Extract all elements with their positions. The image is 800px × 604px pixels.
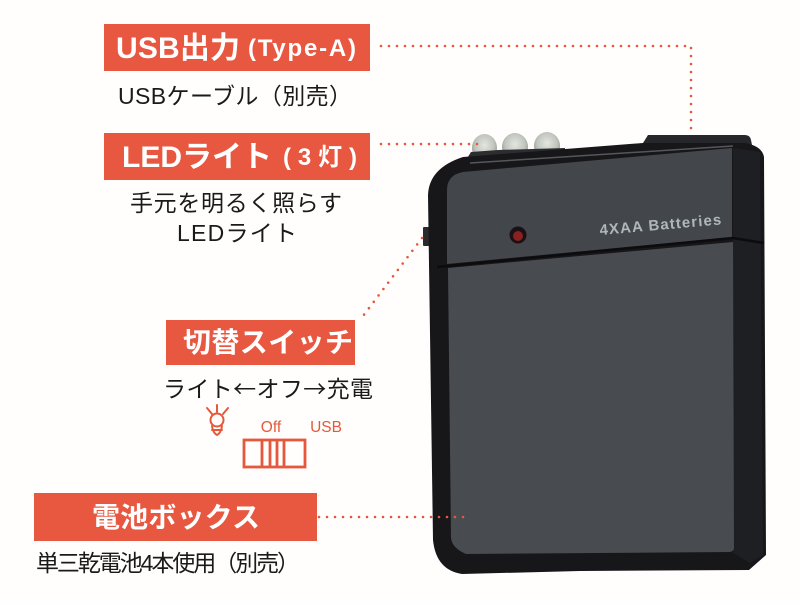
text: 手元を明るく照らす bbox=[130, 190, 342, 216]
leader: USB bbox=[381, 46, 691, 134]
heading bar bbox=[34, 493, 317, 541]
dotted leader lines bbox=[319, 46, 691, 517]
heading bar bbox=[104, 133, 370, 180]
top edge highlight bbox=[470, 146, 733, 163]
heading: LEDライト bbox=[122, 141, 272, 174]
product: battery box bbox=[423, 132, 766, 574]
callout: battery box bbox=[34, 493, 317, 576]
leader: battery box bbox=[319, 516, 466, 518]
leader: switch bbox=[360, 238, 422, 320]
callout: switch: USB bbox=[310, 419, 342, 436]
product label: 4XAA Batteries bbox=[599, 211, 722, 239]
LED lights bbox=[466, 132, 565, 162]
heading bar bbox=[166, 320, 355, 365]
front lower panel bbox=[448, 242, 734, 554]
icon: light bulb bbox=[207, 405, 228, 435]
heading suffix: (3灯) bbox=[283, 144, 357, 171]
callout: switch bbox=[163, 320, 373, 467]
callout: USB output bbox=[104, 24, 370, 109]
split line bbox=[437, 238, 764, 267]
text: USBケーブル（別売） bbox=[118, 83, 352, 109]
switch labels: Off bbox=[261, 419, 282, 436]
callout: LED light bbox=[104, 133, 370, 246]
icon: slide switch bbox=[244, 440, 305, 467]
text: 単三乾電池4本使用（別売） bbox=[36, 550, 300, 576]
heading: 切替スイッチ bbox=[183, 327, 353, 358]
callout: LED light: LEDライト bbox=[177, 220, 297, 246]
power indicator bbox=[510, 226, 526, 244]
USB port cap bbox=[643, 135, 752, 152]
body bbox=[428, 143, 766, 574]
front upper panel bbox=[447, 148, 732, 264]
heading suffix: (Type-A) bbox=[248, 35, 356, 62]
heading bar bbox=[104, 24, 370, 71]
text: ライト←オフ→充電 bbox=[163, 370, 373, 404]
switch nub bbox=[423, 227, 430, 246]
right side shade bbox=[733, 148, 763, 563]
leader: LED bbox=[381, 143, 478, 145]
heading: USB出力 bbox=[116, 32, 240, 65]
heading: 電池ボックス bbox=[92, 502, 260, 533]
